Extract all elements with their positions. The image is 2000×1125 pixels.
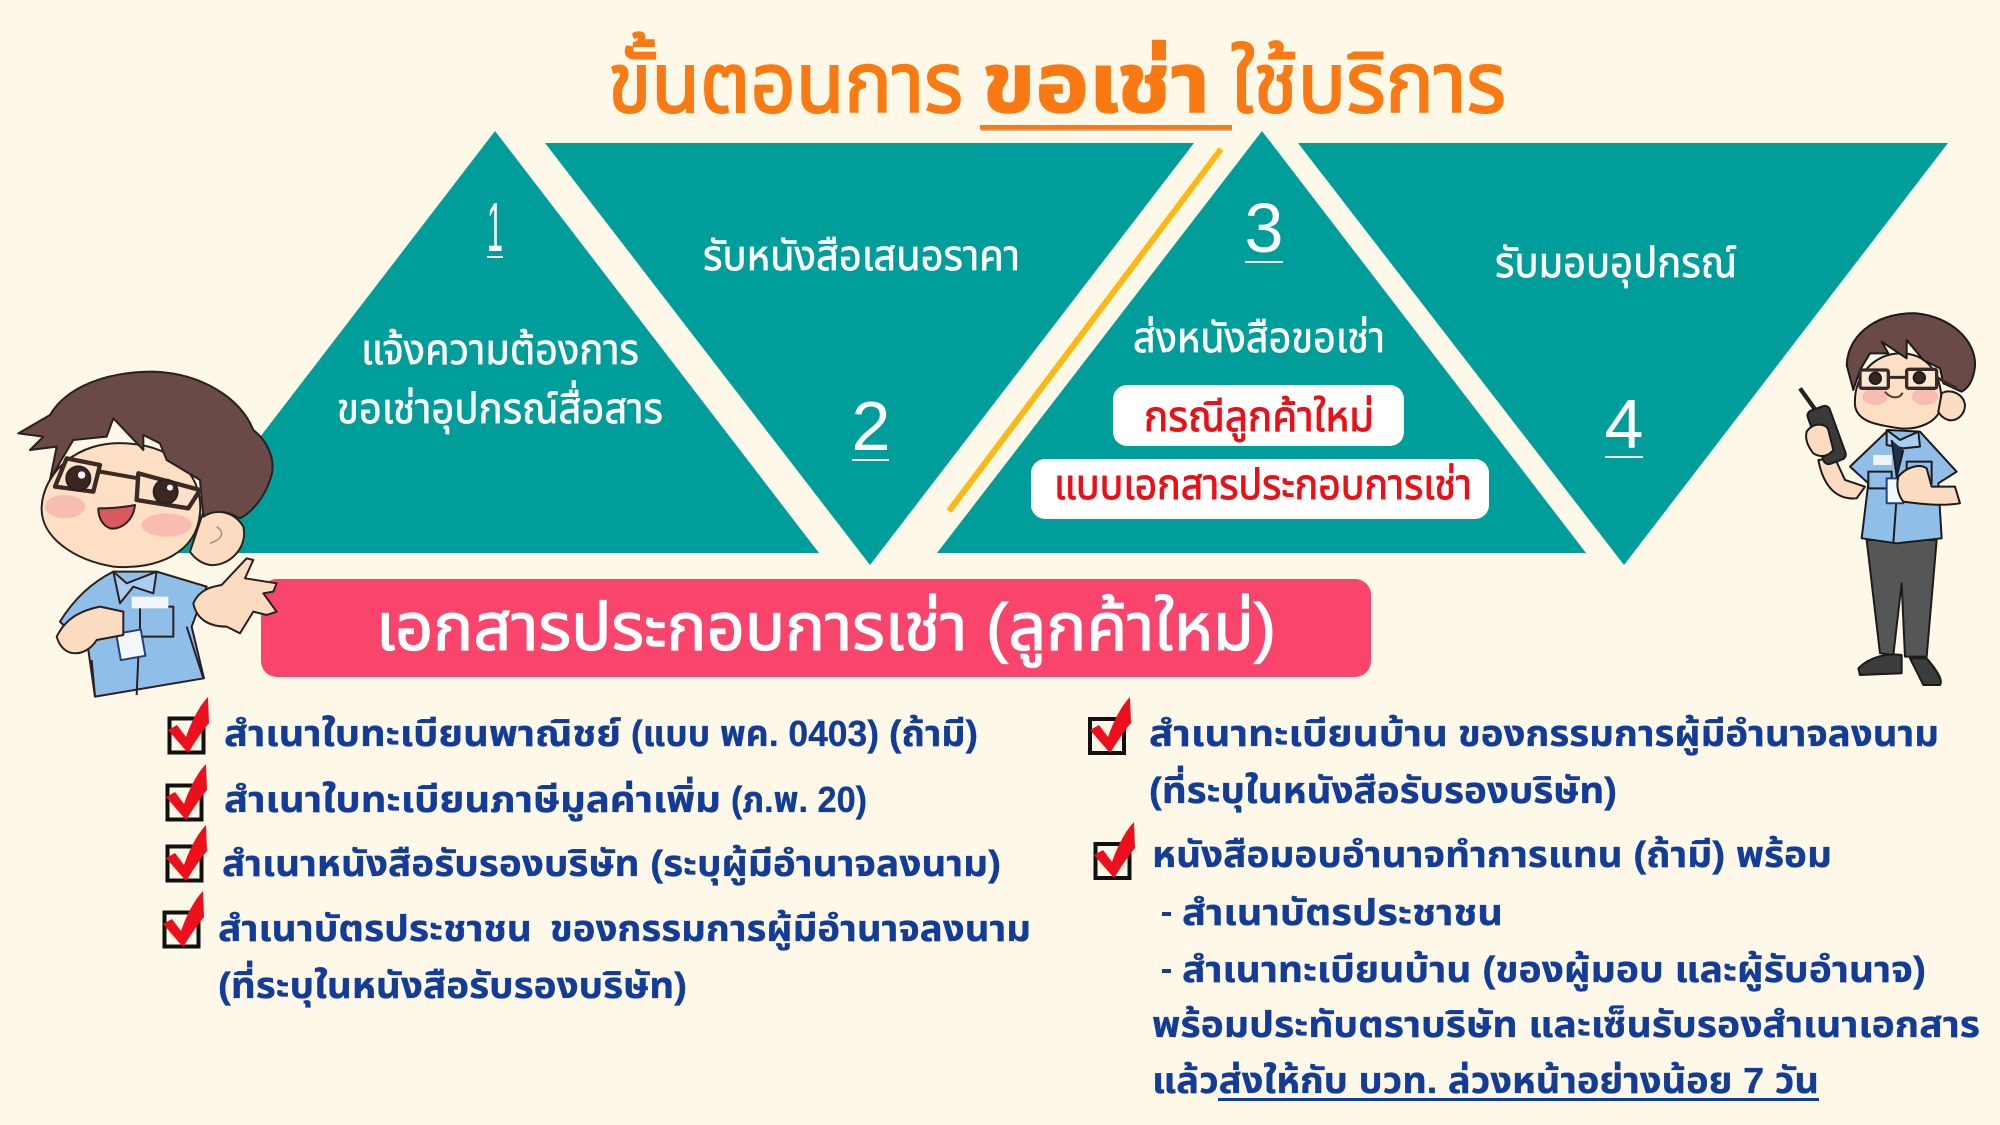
- checklist item 6: [1094, 822, 1980, 1101]
- checklist item 4: (ที่ระบุในหนังสือรับรองบริษัท): [218, 960, 687, 1007]
- yellow diagonal line: [949, 149, 1221, 511]
- checklist item 6: หนังสือมอบอำนาจทำการแทน (ถ้ามี) พร้อม: [1152, 834, 1832, 875]
- step 1 triangle: ขอเช่าอุปกรณ์สื่อสาร: [337, 380, 663, 434]
- checklist item 6: สำเนาบัตรประชาชน: [1182, 892, 1503, 933]
- step 3 triangle: ส่งหนังสือขอเช่า: [1133, 314, 1385, 361]
- step 3 triangle: [937, 131, 1586, 553]
- checklist item 1: [168, 697, 978, 754]
- checklist item 4: ของกรรมการผู้มีอำนาจลงนาม: [550, 908, 1031, 950]
- checklist item 5: [1090, 697, 1939, 812]
- checklist item 6: พร้อมประทับตราบริษัท และเซ็นรับรองสำเนาเอกสาร: [1152, 1004, 1980, 1045]
- character: right staff: [1800, 313, 1975, 685]
- checklist item 2: [166, 764, 867, 821]
- right checklist: [1090, 697, 1980, 1101]
- step 1 triangle: [171, 131, 819, 553]
- checklist item 2: สำเนาใบทะเบียนภาษีมูลค่าเพิ่ม: [224, 776, 721, 821]
- checklist item 1: (ถ้ามี): [889, 713, 978, 754]
- checklist item 5: สำเนาทะเบียนบ้าน: [1149, 713, 1448, 754]
- checklist item 6: แล้วส่งให้กับ บวท. ล่วงหน้าอย่างน้อย 7 วัน: [1152, 1060, 1819, 1101]
- title: ใช้บริการ: [1231, 36, 1506, 130]
- new customer tag: [1113, 385, 1404, 446]
- checklist item 1: สำเนาใบทะเบียนพาณิชย์: [224, 713, 621, 754]
- step 3 triangle: 3: [1245, 189, 1283, 267]
- title: ขอเช่า: [982, 36, 1210, 130]
- checklist item 6: สำเนาทะเบียนบ้าน (ของผู้มอบ และผู้รับอำนาจ): [1182, 949, 1926, 991]
- step 1 triangle: 1: [487, 188, 503, 266]
- step 2 triangle: 2: [852, 387, 890, 465]
- step 2 triangle: [545, 143, 1194, 565]
- checklist item 4: สำเนาบัตรประชาชน: [218, 908, 532, 949]
- step 4 triangle: 4: [1605, 385, 1643, 463]
- step 2 triangle: รับหนังสือเสนอราคา: [703, 232, 1020, 279]
- checklist item 5: (ที่ระบุในหนังสือรับรองบริษัท): [1149, 765, 1617, 812]
- step 4 triangle: [1298, 143, 1948, 565]
- checklist item 2: (ภ.พ. 20): [731, 779, 867, 820]
- checklist item 5: ของกรรมการผู้มีอำนาจลงนาม: [1458, 713, 1939, 755]
- checklist item 1: (แบบ พค. 0403): [631, 713, 879, 754]
- rental documents tag: แบบเอกสารประกอบการเช่า: [1054, 461, 1472, 508]
- checklist item 3: [166, 825, 1001, 885]
- title: ขั้นตอนการ: [608, 32, 963, 130]
- step 1 triangle: แจ้งความต้องการ: [361, 326, 639, 373]
- documents banner: เอกสารประกอบการเช่า (ลูกค้าใหม่): [376, 590, 1276, 668]
- left checklist: [163, 697, 1031, 1007]
- character: left staff: [18, 372, 277, 697]
- step 4 triangle: รับมอบอุปกรณ์: [1495, 239, 1737, 288]
- checklist item 4: [163, 891, 1031, 1007]
- new customer tag: กรณีลูกค้าใหม่: [1144, 393, 1374, 442]
- documents banner: [261, 579, 1371, 677]
- checklist item 3: สำเนาหนังสือรับรองบริษัท (ระบุผู้มีอำนาจลงนาม): [222, 843, 1001, 885]
- title: [608, 32, 1506, 131]
